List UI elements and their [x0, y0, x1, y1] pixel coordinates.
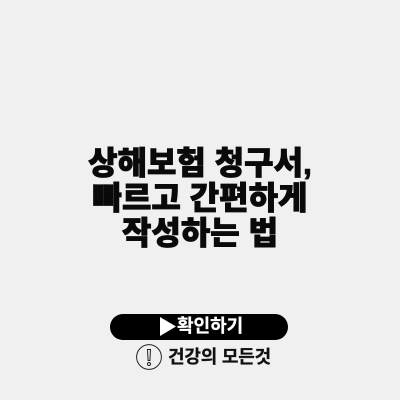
button: confirm — [110, 314, 288, 340]
title: 상해보험 청구서, — [88, 145, 312, 181]
button label: 확인하기 — [177, 316, 243, 336]
title — [88, 145, 312, 251]
title: 빠르고 간편하게 — [92, 180, 307, 216]
brand name: 건강의 모든것 — [168, 347, 271, 367]
title: 작성하는 법 — [122, 215, 278, 251]
brand row — [136, 344, 271, 370]
icon: exclamation circle — [136, 344, 162, 370]
icon: play triangle — [160, 317, 176, 336]
